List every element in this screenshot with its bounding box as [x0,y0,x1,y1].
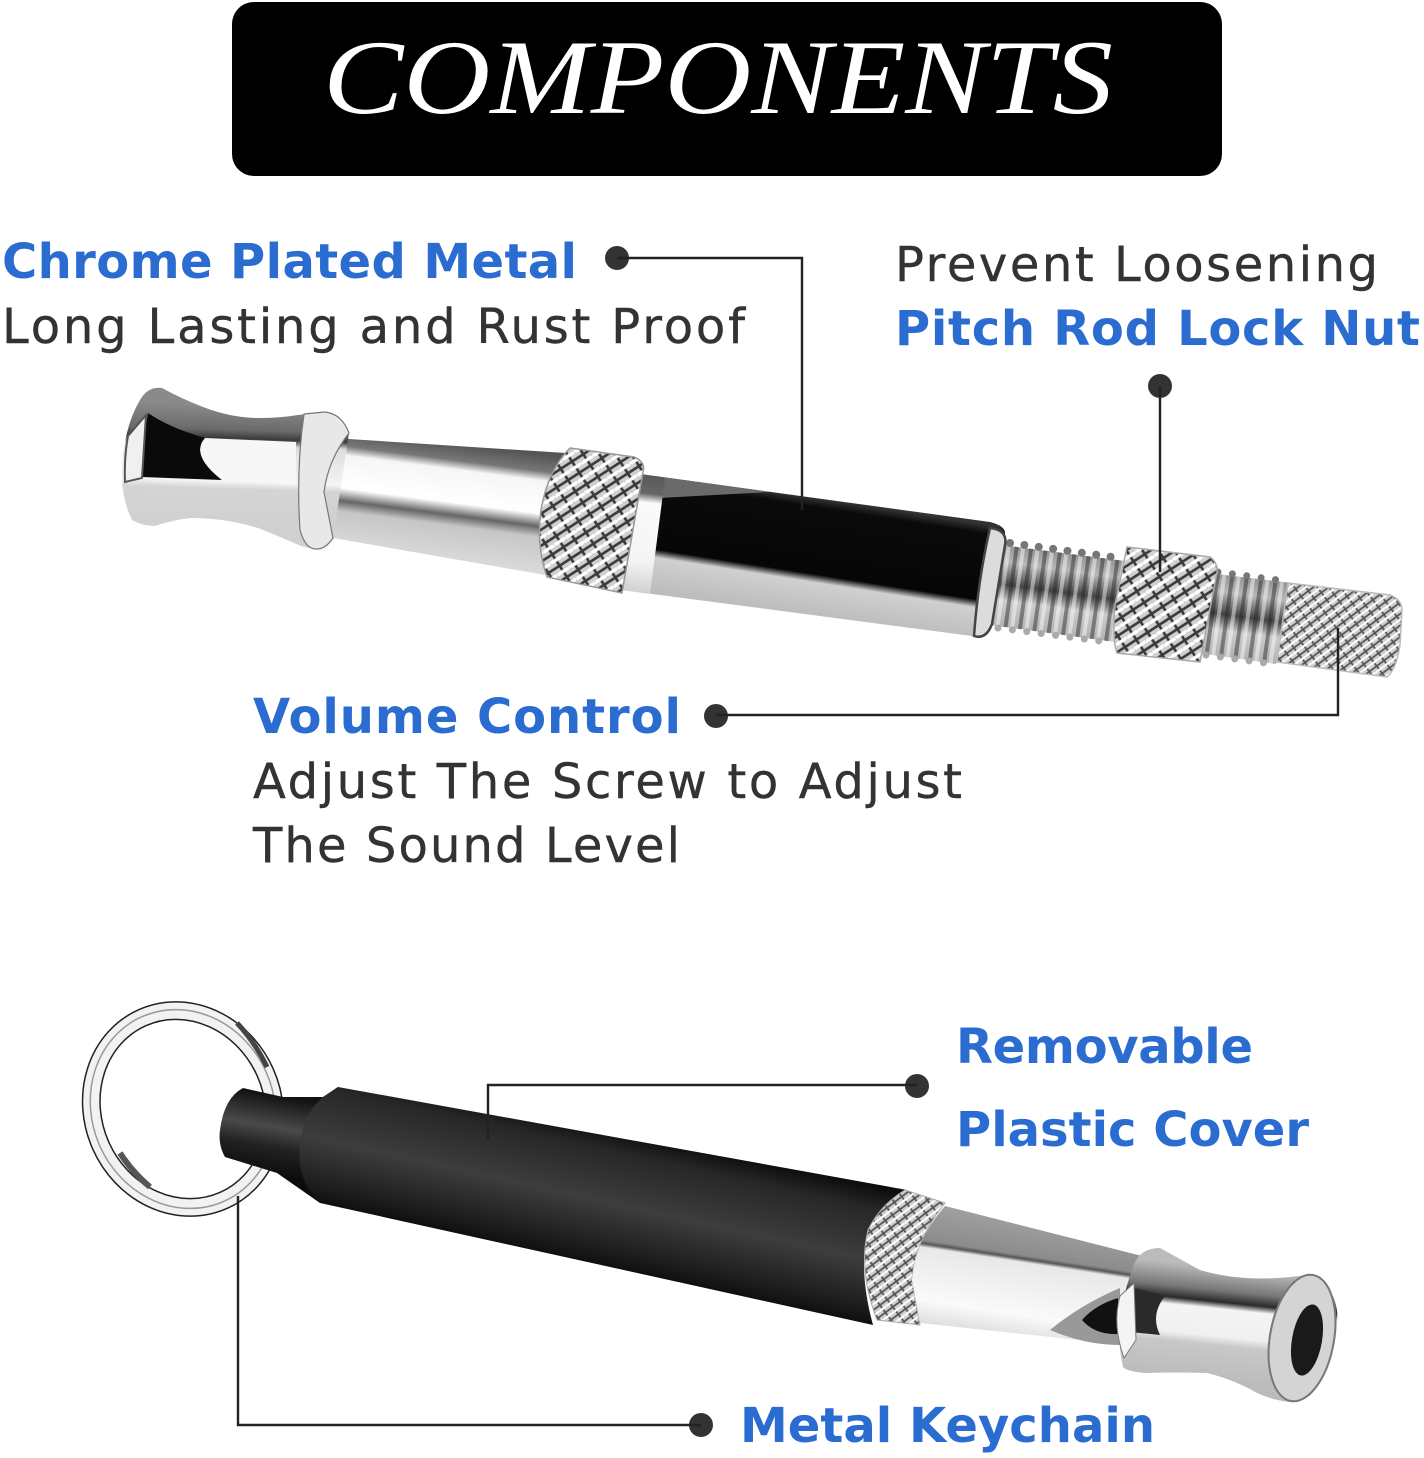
leader: pitch rod lock nut [1148,374,1172,572]
mouthpiece rim [125,415,146,482]
body rear sheen [660,477,770,498]
heading: removable plastic cover: Removable [956,1019,1253,1075]
whistle end collar [974,528,1005,637]
heading: chrome plated metal: Long Lasting and Rust Proof [2,299,746,355]
heading: pitch rod lock nut: Pitch Rod Lock Nut [895,301,1420,357]
plastic cover [299,1087,907,1325]
heading: removable plastic cover [956,1019,1309,1158]
black whistle [220,1087,1345,1407]
heading: pitch rod lock nut: Prevent Loosening [895,237,1378,293]
whistle notch [1050,1288,1120,1345]
heading: chrome plated metal: Chrome Plated Metal [2,234,577,290]
silver shaft [912,1206,1150,1345]
mouthpiece highlight [200,438,296,485]
mouthpiece opening [1286,1302,1328,1378]
silver mouthpiece [1119,1248,1337,1402]
heading: metal keychain: Metal Keychain [740,1398,1155,1454]
heading: volume control: The Sound Level [252,818,680,874]
whistle body cap [620,474,665,594]
heading: volume control: Volume Control [253,689,681,745]
knurled lock nut [1114,547,1217,662]
key ring [59,980,307,1238]
heading: volume control [252,689,962,874]
leader: chrome plated metal [605,246,802,510]
heading: volume control: Adjust The Screw to Adjust [253,754,962,810]
mouthpiece lip [1117,1283,1136,1358]
mouthpiece collar [299,412,349,549]
mouthpiece end [1259,1269,1345,1407]
whistle threads [990,543,1292,664]
knurled ring 1 [539,448,644,593]
whistle body rear [622,474,1005,636]
knurled volume screw [1277,583,1402,677]
title text: COMPONENTS [323,19,1113,136]
heading: removable plastic cover: Plastic Cover [956,1102,1309,1158]
heading: pitch rod lock nut [895,237,1420,357]
knurled ring [865,1190,945,1325]
leader: metal keychain [238,1196,713,1437]
whistle body front [333,438,566,575]
leader: volume control [704,628,1338,728]
whistle mouthpiece [122,388,349,549]
black neck [220,1087,340,1203]
leader: removable plastic cover [488,1074,929,1140]
mouthpiece dark reflection [1130,1288,1165,1335]
mouthpiece dark reflection [142,413,222,480]
whistle notch hole [1082,1298,1118,1334]
title banner [232,2,1222,176]
silver whistle [122,388,1402,677]
heading: chrome plated metal [2,234,746,355]
